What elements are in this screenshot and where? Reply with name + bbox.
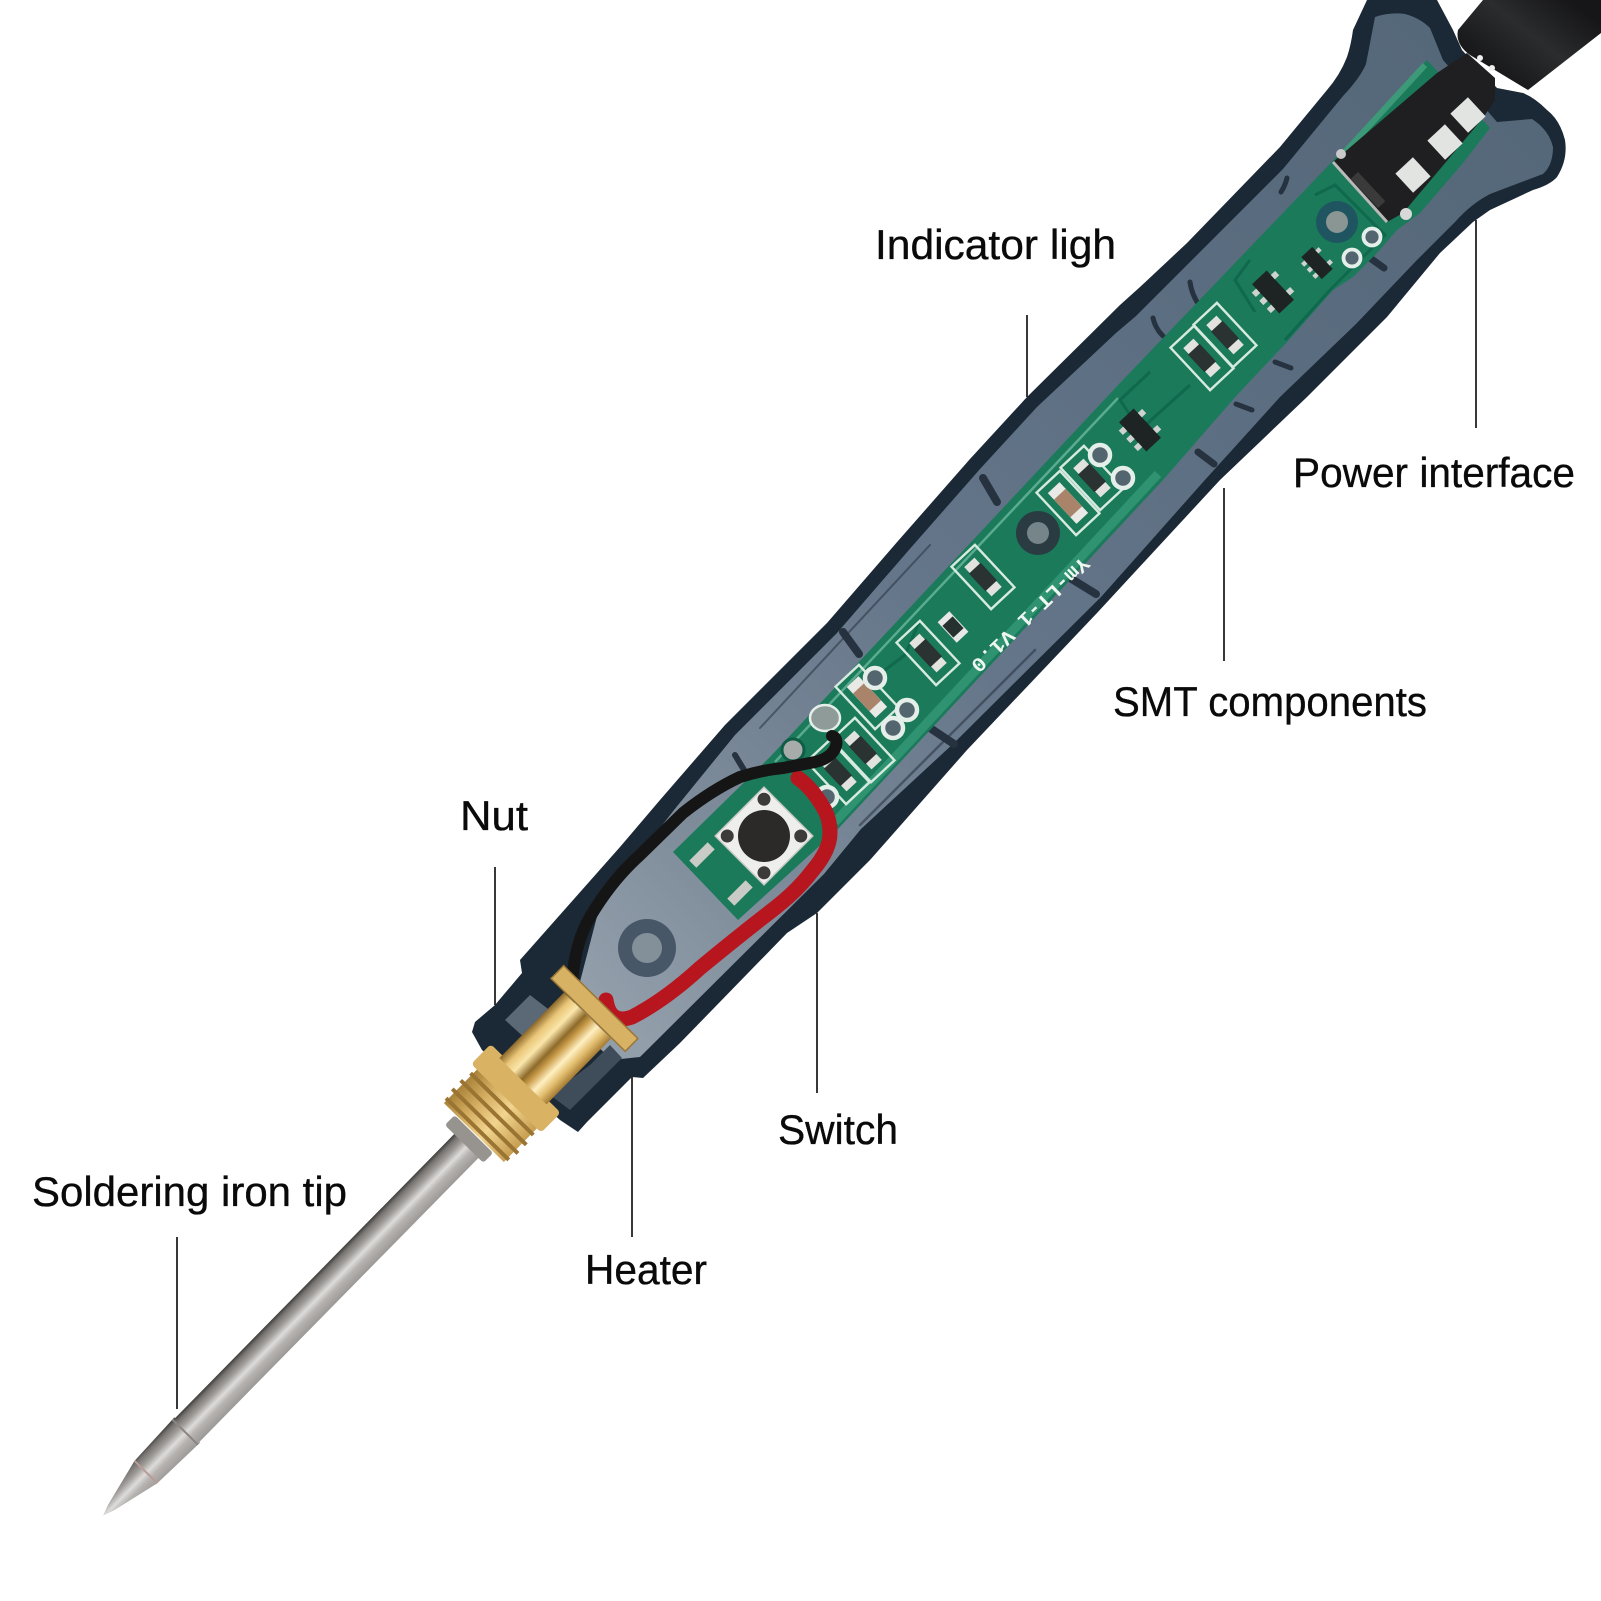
tactile switch: [715, 787, 813, 885]
collar: [471, 1044, 561, 1133]
soldering iron tip: [90, 1131, 481, 1528]
red wire: [606, 778, 830, 1019]
gray collar: [445, 1115, 493, 1163]
leader line: soldering iron tip: [176, 1237, 178, 1409]
circuit board: [673, 60, 1490, 920]
label: smt components: SMT components: [1113, 678, 1427, 725]
housing shell: [472, 0, 1566, 1132]
board solder pads: [689, 842, 753, 906]
housing ribs: [735, 178, 1384, 825]
flange: [551, 966, 638, 1051]
standoff post: [618, 919, 676, 977]
leader line: indicator light: [1026, 315, 1028, 397]
label: soldering iron tip: Soldering iron tip: [32, 1168, 347, 1215]
leader line: heater: [631, 1077, 633, 1237]
label: nut: Nut: [460, 792, 528, 839]
leader line: smt components: [1223, 488, 1225, 661]
power cable: [1458, 0, 1601, 90]
cylinder body: [499, 992, 611, 1104]
label: switch: Switch: [778, 1106, 898, 1153]
smt components: [782, 201, 1380, 807]
nose cavity: [505, 995, 552, 1040]
label: heater: Heater: [585, 1246, 707, 1293]
black wire: [572, 736, 836, 985]
leader line: power interface: [1475, 220, 1477, 428]
leader line: switch: [816, 913, 818, 1093]
board copper traces: [885, 185, 1385, 670]
thread: [441, 1066, 540, 1165]
board label: Ym-LT-1 V1.0: [965, 551, 1093, 676]
leader line: nut: [494, 867, 496, 1005]
label: power interface: Power interface: [1293, 449, 1575, 496]
power jack: [1333, 53, 1495, 222]
label: indicator light: Indicator ligh: [875, 221, 1116, 268]
brass heater assembly: [63, 966, 638, 1548]
housing inner cavity: [570, 13, 1553, 1060]
